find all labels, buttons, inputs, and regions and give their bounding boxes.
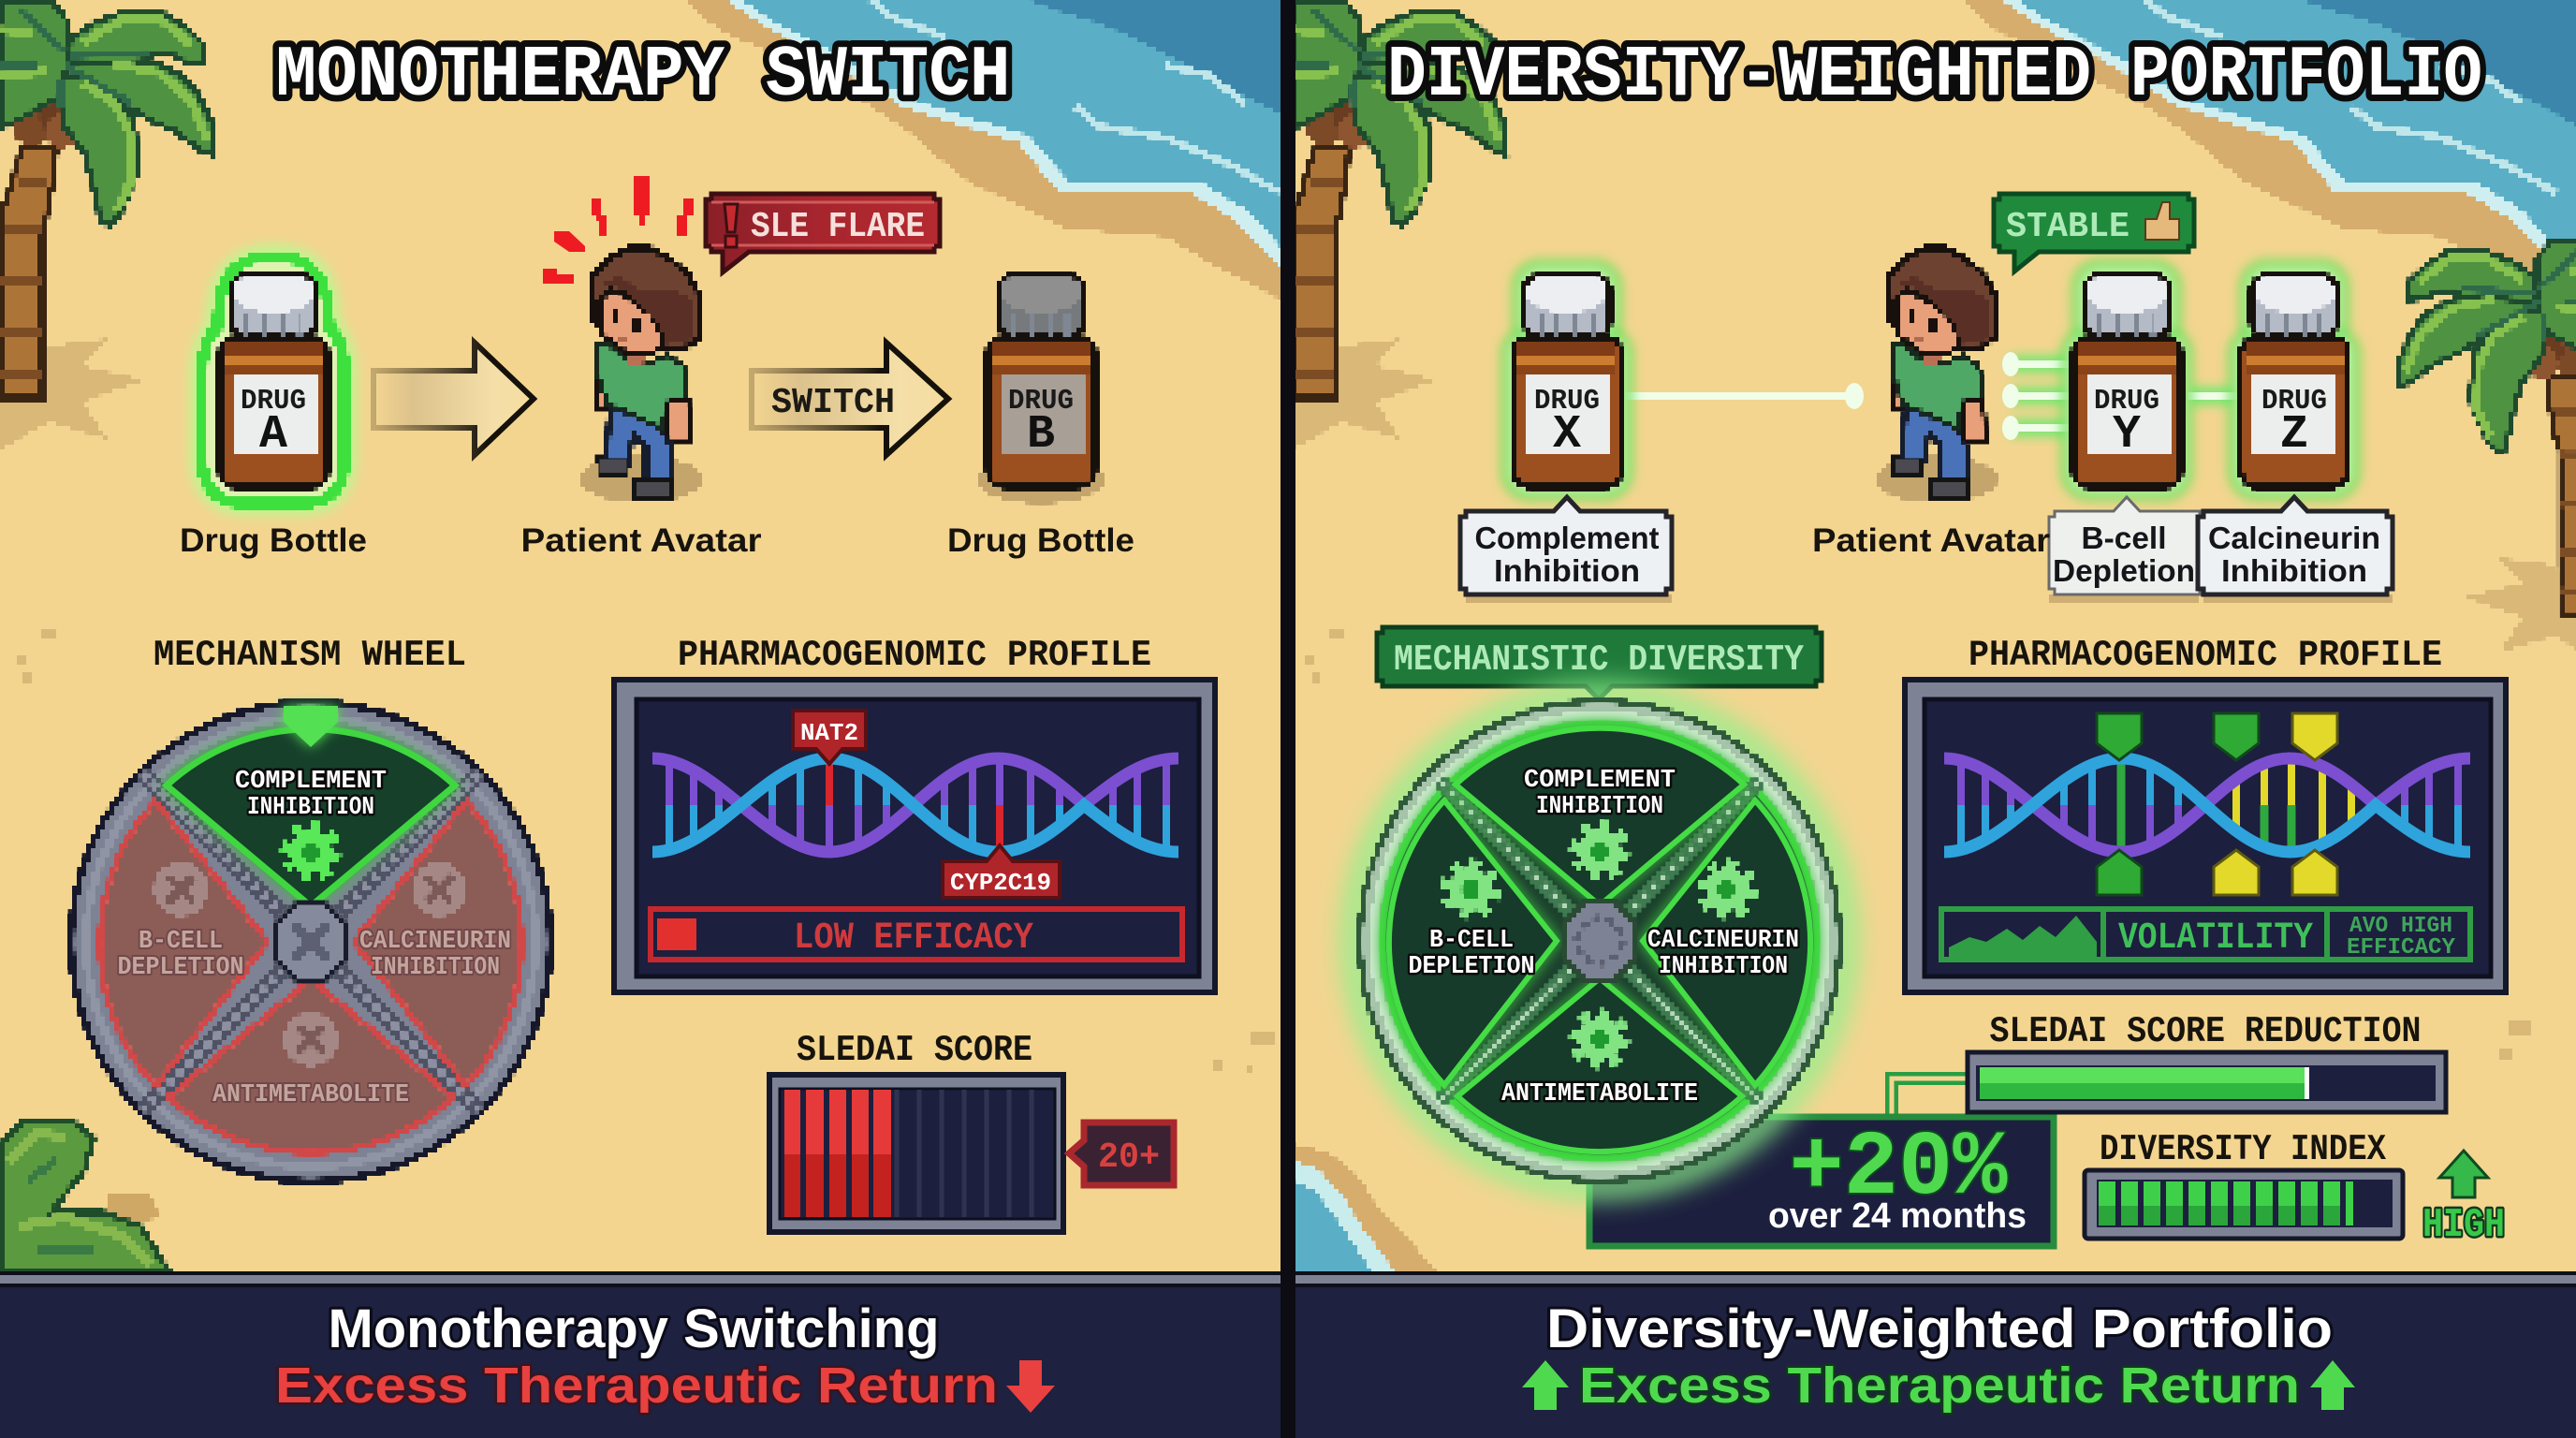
SLE flare callout: SLE FLARE bbox=[751, 207, 925, 247]
callout complement inhibition: Complement bbox=[1475, 521, 1660, 555]
right beach background bbox=[1288, 0, 2576, 1273]
sector: complement inhibition: INHIBITION bbox=[1536, 793, 1663, 821]
mechanistic diversity banner bbox=[1377, 627, 1822, 699]
panel: diversity-weighted portfolio bbox=[1293, 0, 2576, 1438]
drug bottle X: DRUG bbox=[1534, 385, 1600, 418]
pharmacogenomic panel bbox=[614, 680, 1215, 992]
callout calcineurin inhibition bbox=[2198, 497, 2393, 603]
score tag 20+ bbox=[1069, 1123, 1174, 1185]
heading mechanism wheel: MECHANISM WHEEL bbox=[154, 635, 466, 676]
callout complement inhibition bbox=[1460, 497, 1672, 603]
stable callout bbox=[1994, 194, 2194, 271]
drug bottle B greyed: DRUG bbox=[1008, 385, 1074, 418]
CYP2C19 marker: CYP2C19 bbox=[950, 869, 1051, 897]
center divider bbox=[1281, 0, 1295, 1438]
score tag 20+: 20+ bbox=[1098, 1137, 1160, 1178]
sector: complement inhibition active: COMPLEMENT bbox=[235, 768, 387, 796]
arrow labelled switch bbox=[752, 343, 948, 455]
drug bottle X: X bbox=[1553, 408, 1581, 462]
drug bottle A with glow: A bbox=[259, 408, 287, 462]
DNA helix bbox=[652, 758, 1178, 852]
palm bush bottom left bbox=[0, 1120, 168, 1271]
sector: calcineurin inhibition: INHIBITION bbox=[1659, 953, 1788, 981]
title: DIVERSITY-WEIGHTED PORTFOLIO bbox=[1387, 36, 2482, 117]
bottom variant markers bbox=[2097, 850, 2337, 895]
sector: B-cell depletion: DEPLETION bbox=[118, 954, 243, 982]
mechanistic diversity banner: MECHANISTIC DIVERSITY bbox=[1394, 639, 1805, 681]
icon: left green up arrow bbox=[1522, 1360, 1569, 1410]
drug bottle Y: DRUG bbox=[2094, 385, 2159, 418]
arrow labelled switch: SWITCH bbox=[771, 383, 895, 423]
low efficacy meter bbox=[651, 909, 1182, 960]
sector: complement inhibition: COMPLEMENT bbox=[1524, 767, 1676, 795]
drug bottle Z bbox=[2232, 264, 2356, 496]
volatility strip: AVO HIGH bbox=[2349, 914, 2452, 939]
sparkline bbox=[1949, 916, 2097, 957]
NAT2 marker: NAT2 bbox=[800, 719, 858, 747]
DNA helix bbox=[1944, 758, 2470, 852]
sector: B-cell depletion bbox=[100, 801, 268, 1086]
sector: antimetabolite bbox=[168, 979, 453, 1152]
palm tree right bbox=[2400, 240, 2576, 662]
sector: complement inhibition active: INHIBITION bbox=[247, 794, 374, 822]
patient avatar bbox=[1876, 248, 1998, 503]
icon: right green up arrow bbox=[2310, 1360, 2355, 1410]
top variant markers bbox=[2097, 713, 2337, 760]
mechanism wheel bbox=[71, 702, 550, 1181]
drug bottle Y bbox=[2065, 264, 2188, 496]
callout complement inhibition: Inhibition bbox=[1494, 553, 1640, 588]
connectors drug Y to patient bbox=[2002, 352, 2240, 440]
callout B-cell depletion bbox=[2049, 497, 2200, 603]
arrow to patient bbox=[373, 343, 534, 455]
drug bottle Z: DRUG bbox=[2261, 385, 2327, 418]
label high: HIGH bbox=[2422, 1202, 2505, 1249]
label patient avatar: Patient Avatar bbox=[1812, 522, 2050, 559]
result box +20% bbox=[1589, 1078, 2054, 1246]
callout B-cell depletion: B-cell bbox=[2082, 521, 2166, 555]
sector: calcineurin inhibition: CALCINEURIN bbox=[359, 928, 511, 956]
low efficacy meter: LOW EFFICACY bbox=[794, 917, 1033, 960]
sector: calcineurin inhibition bbox=[1643, 800, 1810, 1085]
icon: thumbs up bbox=[2145, 202, 2179, 240]
drug bottle B greyed: B bbox=[1027, 408, 1055, 462]
stable callout: STABLE bbox=[2006, 207, 2130, 247]
selector pointer bbox=[284, 706, 338, 747]
patient avatar bbox=[580, 248, 702, 503]
pharmacogenomic panel bbox=[1905, 680, 2506, 992]
palm tree left bbox=[1293, 0, 1506, 449]
SLEDAI gauge bbox=[769, 1075, 1063, 1232]
callout B-cell depletion: Depletion bbox=[2053, 553, 2195, 588]
sector: calcineurin inhibition: INHIBITION bbox=[371, 954, 500, 982]
volatility strip: VOLATILITY bbox=[2118, 917, 2313, 960]
mechanism wheel all active bbox=[1354, 696, 1845, 1186]
drug bottle X bbox=[1505, 264, 1629, 496]
sector: complement inhibition active bbox=[167, 729, 455, 906]
sector: B-cell depletion: B-CELL bbox=[1429, 927, 1514, 955]
sector: B-cell depletion bbox=[1389, 800, 1557, 1085]
diversity index bar bbox=[2085, 1170, 2403, 1239]
label drug bottle: Drug Bottle bbox=[180, 522, 367, 559]
volatility strip bbox=[1941, 909, 2470, 961]
heading SLEDAI score: SLEDAI SCORE bbox=[797, 1030, 1032, 1071]
footer title: Monotherapy Switching bbox=[328, 1299, 940, 1359]
footer band bbox=[0, 1271, 1281, 1438]
callout calcineurin inhibition: Inhibition bbox=[2221, 553, 2367, 588]
hub bbox=[275, 904, 346, 979]
title: MONOTHERAPY SWITCH bbox=[275, 36, 1011, 117]
palm tree top left bbox=[0, 0, 213, 449]
sector: antimetabolite: ANTIMETABOLITE bbox=[1501, 1080, 1698, 1108]
sector: complement inhibition bbox=[1456, 728, 1744, 905]
sector: antimetabolite: ANTIMETABOLITE bbox=[212, 1081, 409, 1109]
drug bottle A with glow bbox=[202, 257, 344, 504]
icon: green up arrow high bbox=[2439, 1151, 2488, 1197]
footer band bbox=[1295, 1271, 2576, 1438]
sector: B-cell depletion: DEPLETION bbox=[1408, 953, 1535, 981]
heading SLEDAI score reduction: SLEDAI SCORE REDUCTION bbox=[1990, 1011, 2421, 1052]
connector drug X to patient bbox=[1625, 383, 1864, 409]
volatility strip: EFFICACY bbox=[2347, 935, 2456, 961]
callout calcineurin inhibition: Calcineurin bbox=[2208, 521, 2380, 555]
SLEDAI reduction bar bbox=[1968, 1052, 2446, 1112]
result box +20%: over 24 months bbox=[1768, 1196, 2027, 1236]
footer result: Excess Therapeutic Return bbox=[275, 1357, 998, 1414]
drug bottle B greyed bbox=[977, 275, 1105, 504]
left beach background bbox=[0, 0, 1329, 1273]
CYP2C19 marker bbox=[943, 845, 1060, 898]
footer title: Diversity-Weighted Portfolio bbox=[1546, 1299, 2333, 1359]
footer result: Excess Therapeutic Return bbox=[1579, 1357, 2300, 1414]
sector: calcineurin inhibition bbox=[354, 801, 521, 1086]
label drug bottle: Drug Bottle bbox=[947, 522, 1134, 559]
sector: B-cell depletion: B-CELL bbox=[139, 928, 223, 956]
drug bottle Z: Z bbox=[2280, 408, 2308, 462]
drug bottle Y: Y bbox=[2113, 408, 2141, 462]
heading diversity index: DIVERSITY INDEX bbox=[2100, 1129, 2387, 1170]
icon: red down arrow bbox=[1006, 1360, 1055, 1413]
hub gear bbox=[1564, 902, 1635, 980]
sector: antimetabolite bbox=[1457, 978, 1742, 1152]
NAT2 marker bbox=[793, 711, 866, 764]
heading pharmacogenomic profile: PHARMACOGENOMIC PROFILE bbox=[1969, 635, 2442, 676]
result box +20%: +20% bbox=[1790, 1118, 2008, 1221]
drug bottle A with glow: DRUG bbox=[241, 385, 306, 418]
SLE flare callout bbox=[706, 194, 940, 272]
heading pharmacogenomic profile: PHARMACOGENOMIC PROFILE bbox=[678, 635, 1151, 676]
label patient avatar: Patient Avatar bbox=[520, 522, 762, 559]
panel: monotherapy switch bbox=[0, 0, 1281, 1438]
sector: calcineurin inhibition: CALCINEURIN bbox=[1647, 927, 1799, 955]
flare burst icon bbox=[543, 176, 694, 284]
